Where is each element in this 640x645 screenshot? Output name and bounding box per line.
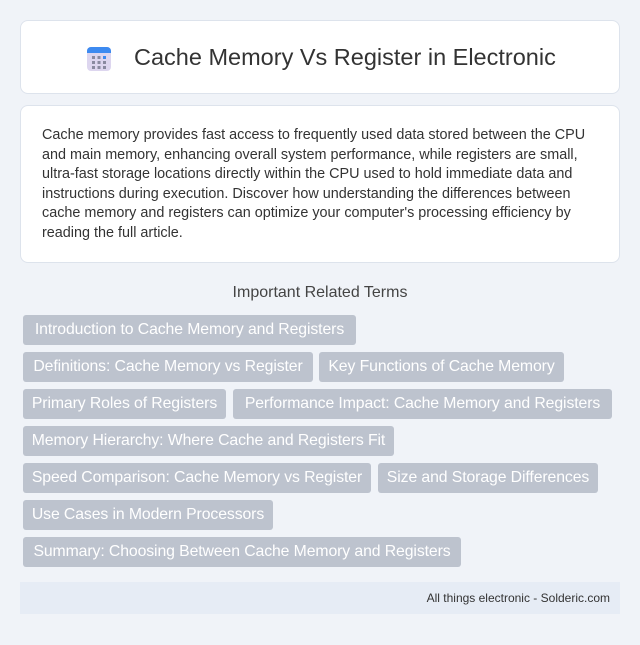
tag: Performance Impact: Cache Memory and Registers (245, 395, 600, 412)
footer text: All things electronic - Solderic.com (427, 591, 610, 605)
description text: Cache memory provides fast access to frequently used data stored between the CPU and main memory, enhancing overall system performance, while registers are small, ultra-fast storage locations directly within the CPU used to hold immediate data and instructions during execution. Discover how understanding the differences between cache memory and registers can optimize your computer's processing efficiency by reading the full article. (42, 127, 585, 240)
tag (233, 389, 612, 419)
tag (319, 352, 564, 382)
description panel (20, 105, 620, 263)
title panel (20, 20, 620, 94)
tag: Size and Storage Differences (387, 469, 589, 486)
tag: Definitions: Cache Memory vs Register (33, 358, 303, 375)
tag (23, 500, 273, 530)
icon: calendar (87, 47, 111, 71)
title: Cache Memory Vs Register in Electronic (134, 44, 556, 70)
tag: Speed Comparison: Cache Memory vs Register (32, 469, 362, 486)
tag: Introduction to Cache Memory and Registers (35, 321, 344, 338)
tag (23, 426, 394, 456)
tag (23, 389, 226, 419)
heading: related terms: Important Related Terms (233, 284, 407, 301)
tag (23, 537, 461, 567)
tag (378, 463, 598, 493)
tag (23, 463, 371, 493)
tag: Use Cases in Modern Processors (32, 506, 264, 523)
footer (20, 582, 620, 614)
tag: Summary: Choosing Between Cache Memory and Registers (33, 543, 451, 560)
tag (23, 352, 313, 382)
tag: Primary Roles of Registers (32, 395, 217, 412)
tag: Key Functions of Cache Memory (328, 358, 555, 375)
tag: Memory Hierarchy: Where Cache and Registers Fit (32, 432, 385, 449)
tag (23, 315, 356, 345)
